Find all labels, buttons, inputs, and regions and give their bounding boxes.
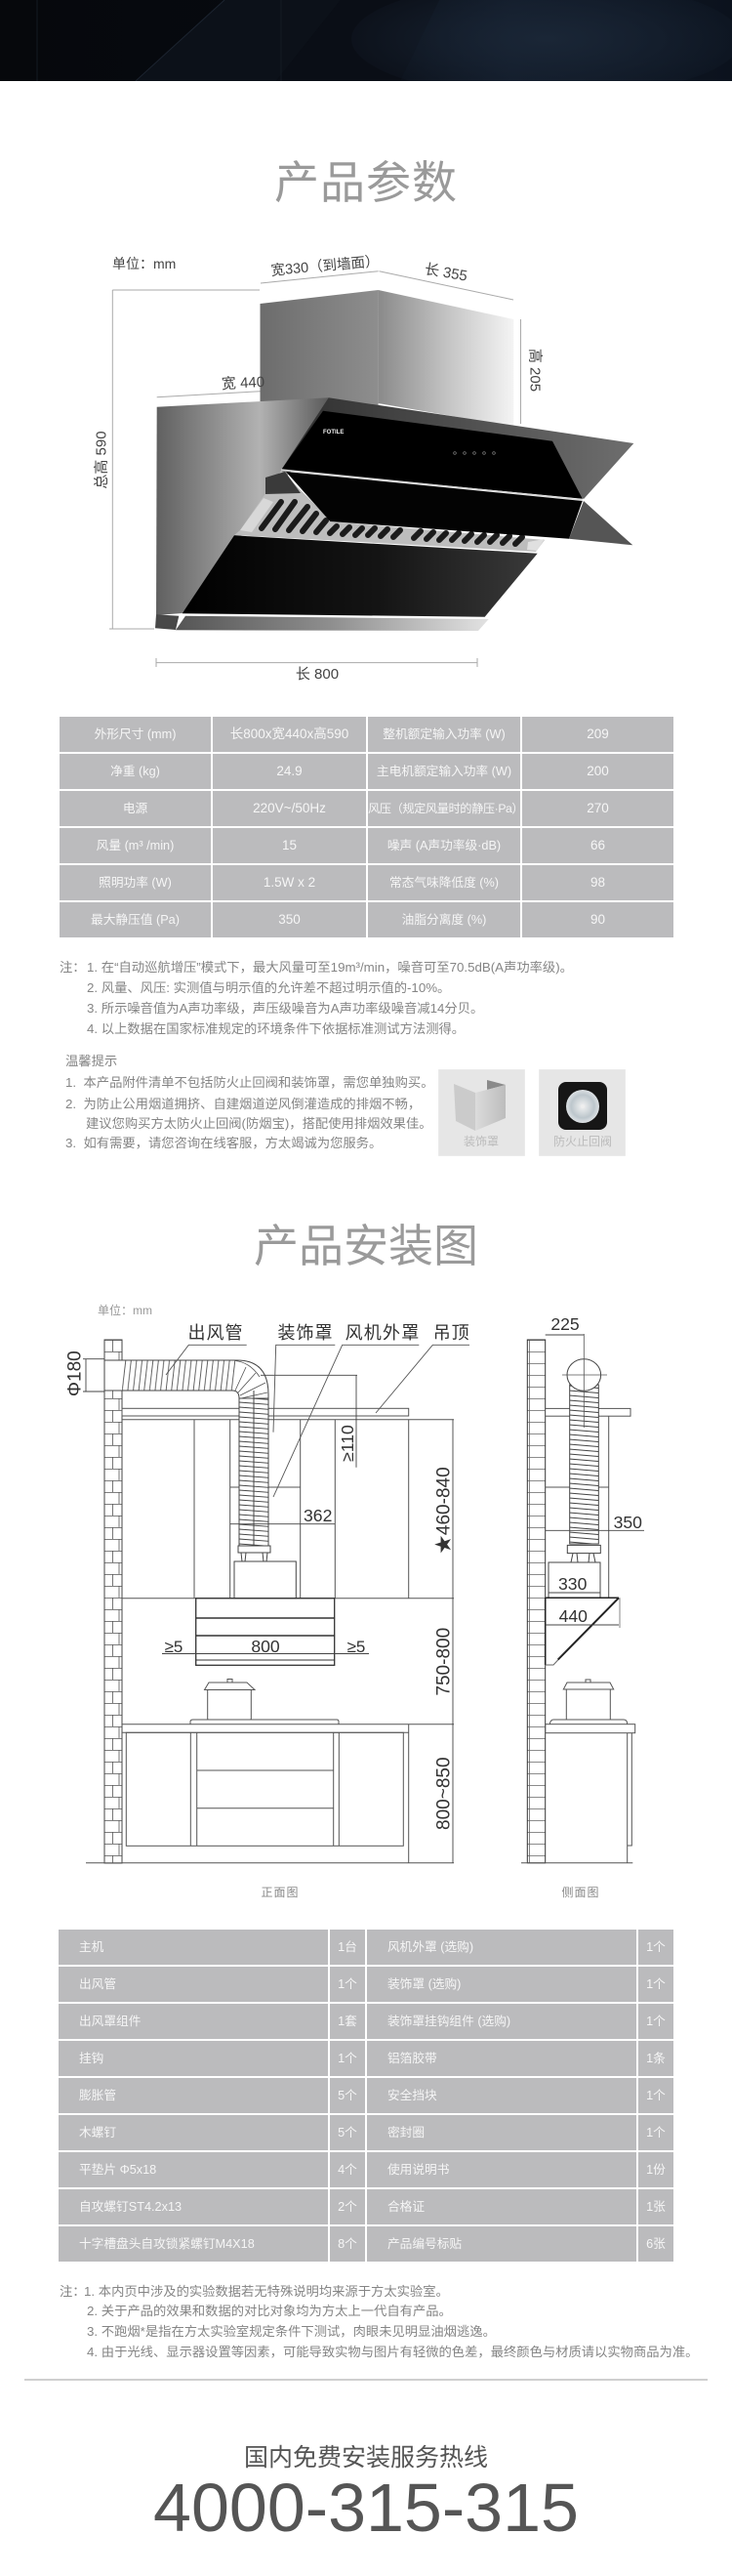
installation diagram: side view [521,1314,644,1899]
text: 330: 330 [558,1574,588,1594]
text: length 355: 长 355 [424,261,468,285]
accessory row 6: 5个 [338,2126,357,2140]
spec row 6: 油脂分离度 (%) [402,912,486,926]
accessories table [59,1930,673,2262]
card: decorative cover accessory [438,1069,525,1156]
accessory row 8: 2个 [338,2200,357,2214]
accessory row 6: 密封圈 [387,2126,425,2140]
note 1: 1. 本内页中涉及的实验数据若无特殊说明均来源于方太实验室。 [84,2284,449,2299]
spec row 2: 净重 (kg) [110,764,160,777]
lower glass [183,535,538,617]
spec row 2: 200 [587,764,609,777]
accessory row 2 [59,1967,673,2002]
accessory row 9 [59,2226,673,2262]
accessory row 5: 5个 [338,2089,357,2102]
brand text: FOTILE [323,430,344,436]
label: exhaust pipe: 出风管 [187,1323,244,1343]
notes block 2 [60,2284,698,2359]
accessory row 2: 1个 [646,1977,666,1991]
card: decorative cover accessory: 装饰罩 [464,1135,499,1148]
spec row 3: 270 [587,801,609,814]
note 4: 4. 由于光线、显示器设置等因素，可能导致实物与图片有轻微的色差，最终颜色与材质请以实物商品为准。 [87,2345,698,2359]
spec row 1 [60,717,673,752]
label: ceiling [376,1323,470,1413]
spec row 1: 外形尺寸 (mm) [95,727,176,740]
accessory row 1: 主机 [79,1940,103,1954]
spec row 4: 15 [282,838,297,852]
spec row 2 [60,754,673,789]
title: product parameters: 产品参数 [274,157,458,208]
building outline [122,1408,454,1599]
accessory row 6: 木螺钉 [79,2126,116,2140]
tip 1: 1. 本产品附件清单不包括防火止回阀和装饰罩，需您单独购买。 [65,1075,433,1090]
middle wing [569,501,632,545]
spec row 3: 电源 [123,801,147,814]
warm tips block [65,1054,433,1150]
accessory row 9: 8个 [338,2237,357,2251]
label: fan cover [273,1323,420,1497]
notes block 1 [60,960,573,1036]
card: fire check valve accessory: 防火止回阀 [553,1134,612,1148]
text: clearance left: ≥5 [165,1638,183,1656]
accessory row 8: 合格证 [387,2200,425,2214]
text: width 440: 宽 440 [222,374,265,393]
accessory row 5: 膨胀管 [79,2089,116,2102]
accessory row 1: 1个 [646,1940,666,1954]
accessory row 3: 1个 [646,2015,666,2028]
note 3: 3. 所示噪音值为A声功率级，声压级噪音为A声功率级噪音减14分贝。 [87,1001,483,1016]
accessory row 7 [59,2152,673,2187]
accessory row 4 [59,2041,673,2076]
label: fan cover: 风机外罩 [346,1323,420,1343]
tips heading: 温馨提示 [65,1054,117,1068]
spec row 3 [60,791,673,826]
text: total height 590: 总高 590 [94,431,109,489]
note 4: 4. 以上数据在国家标准规定的环境条件下依据标准测试方法测得。 [87,1021,465,1036]
spec row 5: 常态气味降低度 (%) [389,875,499,889]
hotline heading: 国内免费安装服务热线 [244,2444,488,2472]
hood front [196,1599,335,1665]
accessory row 8 [59,2189,673,2224]
dimension lines side [546,1335,644,1625]
top dark banner [0,0,732,81]
spec row 6: 90 [590,912,605,926]
spec row 4 [60,828,673,863]
note 3: 3. 不跑烟*是指在方太实验室规定条件下测试，肉眼未见明显油烟逃逸。 [87,2324,496,2339]
accessory row 6 [59,2115,673,2150]
spec row 3: 220V~/50Hz [253,801,326,814]
accessory row 9: 十字槽盘头自攻锁紧螺钉M4X18 [79,2237,255,2251]
text: clearance right: ≥5 [347,1638,365,1656]
caption: side view: 侧面图 [561,1886,600,1899]
accessory row 4: 1条 [646,2052,666,2065]
label: decorative cover [273,1323,335,1433]
exhaust duct [104,1360,268,1546]
brick wall [104,1340,122,1863]
note 1: 1. 在“自动巡航增压”模式下，最大风量可至19m³/min，噪音可至70.5dB(A声功率级)。 [87,960,573,975]
hood body [155,397,633,631]
note 2: 2. 风量、风压: 实测值与明示值的允许差不超过明示值的-10%。 [87,980,450,995]
spec row 6: 350 [278,912,301,926]
text: height 205: 高 205 [527,349,543,392]
tip 2: 2. 为防止公用烟道拥挤、自建烟道逆风倒灌造成的排烟不畅， [65,1097,421,1111]
spec table [60,717,673,937]
label: ceiling: 吊顶 [433,1323,470,1343]
accessory row 7: 1份 [646,2163,666,2177]
text: length 800: 长 800 [296,666,339,683]
accessory row 1: 风机外罩 (选购) [387,1940,473,1954]
hood width dimension [162,1652,369,1654]
text: 800~850: 800~850 [433,1757,455,1830]
text: min 110: ≥110 [338,1425,357,1462]
spec row 4: 66 [590,838,605,852]
text: phi 180: Φ180 [64,1350,86,1396]
ceiling and cover lines [546,1408,630,1598]
accessory row 5: 1个 [646,2089,666,2102]
accessory row 3: 出风罩组件 [79,2015,141,2028]
installation diagram: front view [64,1303,470,1899]
silver edge [281,470,583,500]
brick wall side [527,1340,546,1863]
accessory row 3: 1套 [338,2015,357,2028]
text: 362: 362 [304,1506,332,1525]
text: 460-840: ★460-840 [433,1467,455,1554]
counter side [521,1720,635,1863]
text: 440: 440 [559,1606,588,1626]
vent slots [262,502,522,544]
note 2: 2. 关于产品的效果和数据的对比对象均为方太上一代自有产品。 [87,2304,452,2318]
card: fire check valve accessory [539,1069,626,1156]
text: 750-800: 750-800 [433,1628,455,1696]
accessory row 2: 1个 [338,1977,357,1991]
spec row 2: 主电机额定输入功率 (W) [377,764,511,777]
product diagram: range hood with dimensions [94,253,634,683]
label: decorative cover: 装饰罩 [277,1323,334,1343]
accessory row 9: 产品编号标贴 [387,2237,462,2251]
spec row 5: 98 [590,875,605,889]
spec row 6 [60,902,673,937]
accessory row 4: 1个 [338,2052,357,2065]
spec row 5 [60,865,673,900]
accessory row 5: 安全挡块 [387,2089,437,2102]
accessory row 4: 铝箔胶带 [387,2052,437,2065]
vent and filter area [234,471,545,552]
upper glass outer [281,397,633,499]
duct side [562,1334,607,1562]
text: width 330 to wall: 宽330（到墙面） [270,253,380,279]
accessory row 7: 使用说明书 [387,2163,449,2177]
dimension lines top [109,271,521,667]
accessory row 9: 6张 [646,2237,666,2251]
accessory row 2: 装饰罩 (选购) [387,1977,461,1991]
spec row 1: 209 [587,727,609,740]
fan box side [549,1562,600,1598]
spec row 6: 最大静压值 (Pa) [91,912,180,926]
accessory row 7: 平垫片 Φ5x18 [79,2163,156,2177]
text: 800: 800 [251,1637,280,1656]
fan outer box [234,1546,296,1599]
spec row 1: 整机额定输入功率 (W) [383,727,506,740]
accessory row 1: 1台 [338,1940,357,1954]
title: installation diagram: 产品安装图 [254,1221,478,1271]
text: 225: 225 [550,1314,580,1334]
tip 3: 3. 如有需要，请您咨询在线客服，方太竭诚为您服务。 [65,1136,382,1150]
spec row 2: 24.9 [276,764,303,777]
tip 2 continued: 建议您购买方太防火止回阀(防烟宝)，搭配使用排烟效果佳。 [86,1116,432,1131]
side panel [156,397,329,615]
spec row 5: 1.5W x 2 [264,875,315,889]
spec row 3: 风压（规定风量时的静压·Pa） [368,801,523,814]
spec row 4: 噪声 (A声功率级·dB) [387,838,501,852]
middle black panel [286,472,583,539]
spec row 5: 照明功率 (W) [99,875,172,889]
note label: 注： [60,960,86,975]
accessory row 5 [59,2078,673,2113]
label: exhaust pipe [166,1323,247,1375]
accessory row 2: 出风管 [79,1977,116,1991]
accessory row 3: 装饰罩挂钩组件 (选购) [387,2015,510,2028]
accessory row 4: 挂钩 [79,2052,103,2065]
note label: 注： [60,2284,86,2299]
accessory row 7: 4个 [338,2163,357,2177]
hood side [546,1598,620,1665]
spec row 1: 长800x宽440x高590 [230,727,348,740]
accessory row 8: 1张 [646,2200,666,2214]
counter and cabinet [86,1720,454,1863]
bottom strip left [155,614,179,630]
text: 350: 350 [614,1513,642,1532]
back box (chimney cover) [260,290,513,427]
hotline number: 4000-315-315 [153,2470,579,2546]
text: unit: 单位：mm [112,256,176,271]
pot [205,1680,255,1720]
control buttons [454,452,495,454]
dimension lines [83,1359,453,1863]
spec row 4: 风量 (m³ /min) [97,838,174,852]
text: unit: 单位：mm [98,1303,152,1317]
accessory row 6: 1个 [646,2126,666,2140]
accessory row 1 [59,1930,673,1965]
pot side [563,1680,614,1720]
accessory row 8: 自攻螺钉ST4.2x13 [79,2200,182,2214]
bottom strip front [176,616,489,631]
caption: front view: 正面图 [261,1886,300,1899]
upper black panel [281,411,583,499]
accessory row 3 [59,2004,673,2039]
